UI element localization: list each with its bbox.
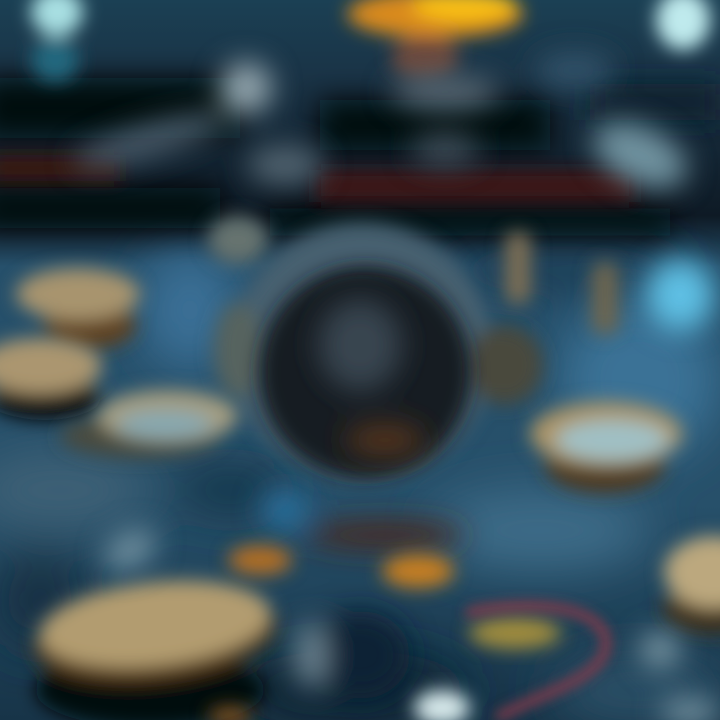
background colour patches: [0, 245, 720, 720]
gear dark body: [259, 266, 471, 478]
bowl: upper left: [16, 268, 140, 349]
gear: [214, 222, 543, 482]
bowl: large lower left: [29, 570, 281, 720]
bowl: right: [530, 402, 682, 493]
gear outer ring: [214, 222, 543, 482]
glow: top left: [31, 0, 83, 82]
bowl: lower right: [662, 536, 720, 634]
top dark bands: [0, 78, 720, 236]
white glow bottom: [414, 690, 470, 720]
glow: orange light: [347, 0, 523, 80]
grey blobs in upper area: [69, 52, 697, 202]
bowl: middle left: [0, 338, 102, 420]
dark red bands: [0, 155, 635, 202]
glow: cyan right: [646, 259, 714, 331]
posts: [208, 216, 618, 334]
gear centre: [318, 299, 425, 456]
lower area details: [97, 490, 720, 720]
red curve: [470, 606, 606, 716]
glow: top right: [656, 0, 710, 50]
orange accents: [208, 545, 454, 720]
yellow accent: [469, 617, 561, 649]
bowl: centre left: [60, 390, 238, 458]
